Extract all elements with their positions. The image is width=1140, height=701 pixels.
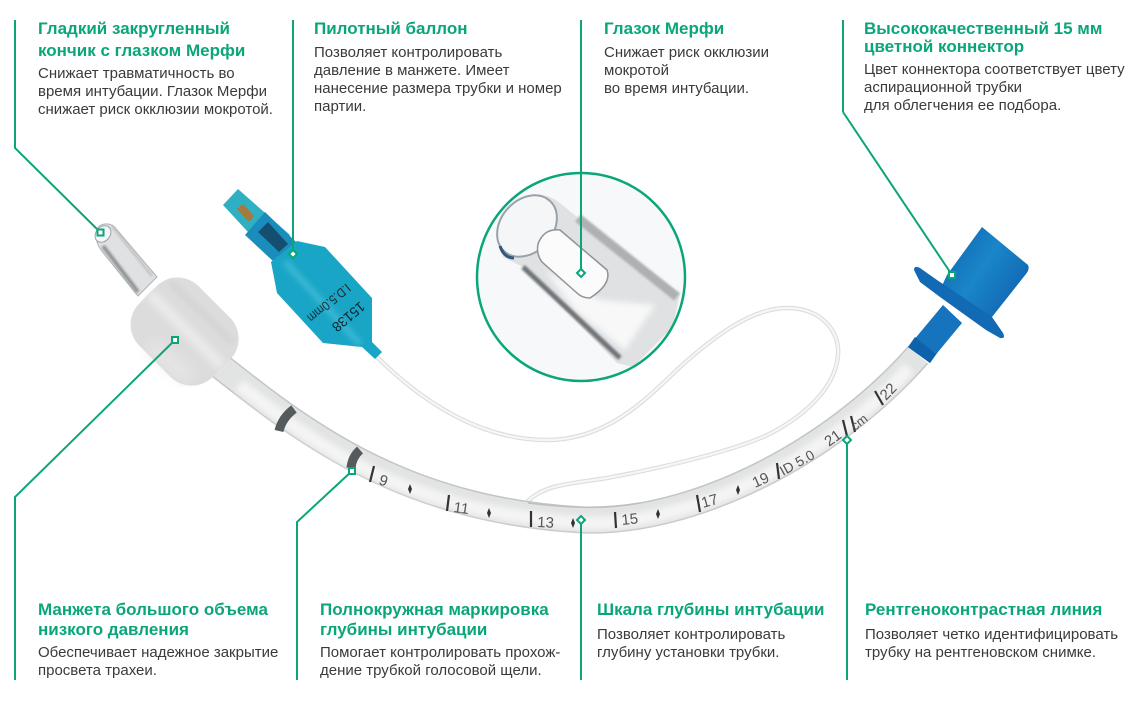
text: 15 mm connector: [864, 19, 1125, 114]
text: depth scale: глубину установки трубки.: [597, 644, 779, 661]
depth scale numbers: 21: [821, 427, 845, 450]
pilot balloon: 15138: [329, 299, 368, 336]
text: smooth rounded tip: Гладкий закругленный: [38, 19, 230, 38]
depth scale numbers: 17: [699, 491, 720, 512]
text: depth scale: [597, 600, 824, 661]
depth scale numbers: ID 5.0: [777, 446, 817, 479]
pilot balloon: I.D.5.0mm: [304, 281, 354, 326]
depth scale numbers: 9: [377, 472, 390, 490]
text: depth marking: Помогает контролировать прохож-: [320, 644, 560, 661]
text: smooth rounded tip: кончик с глазком Мерфи: [38, 41, 245, 60]
15 mm blue connector: [908, 227, 1029, 363]
leader line markers: [98, 230, 955, 524]
depth scale numbers: 19: [750, 469, 772, 492]
text: pilot balloon: [314, 19, 562, 115]
text: 15 mm connector: Высококачественный 15 мм: [864, 19, 1102, 38]
text: depth marking: глубины интубации: [320, 620, 487, 639]
text: Murphy eye: Снижает риск окклюзии: [604, 44, 769, 61]
text: cuff: Обеспечивает надежное закрытие: [38, 644, 278, 661]
text: smooth rounded tip: [38, 19, 273, 118]
text: radiopaque line: трубку на рентгеновском снимке.: [865, 644, 1096, 661]
distal tip with Murphy eye: [92, 223, 157, 296]
pilot balloon: [271, 241, 382, 359]
text: 15 mm connector: аспирационной трубки: [864, 79, 1022, 96]
text: cuff: низкого давления: [38, 620, 189, 639]
text: pilot balloon: партии.: [314, 98, 366, 115]
depth scale numbers: 11: [452, 499, 470, 518]
depth scale numbers: 15: [621, 510, 639, 529]
text: pilot balloon: нанесение размера трубки и номер: [314, 80, 562, 97]
depth scale numbers: cm: [848, 411, 871, 433]
text: 15 mm connector: Цвет коннектора соответствует цвету: [864, 61, 1125, 78]
text: 15 mm connector: для облегчения ее подбора.: [864, 97, 1061, 114]
text: depth marking: [320, 600, 560, 679]
text: depth marking: дение трубкой голосовой щели.: [320, 662, 542, 679]
pilot balloon connector: [223, 189, 296, 262]
text: cuff: просвета трахеи.: [38, 662, 157, 679]
text: pilot balloon: Позволяет контролировать: [314, 44, 502, 61]
text: Murphy eye: мокротой: [604, 62, 669, 79]
full-circle depth marks: [279, 409, 360, 468]
text: radiopaque line: Позволяет четко идентифицировать: [865, 626, 1118, 643]
depth scale numbers: 22: [877, 380, 900, 404]
depth scale numbers: 13: [537, 514, 554, 532]
depth scale numbers: [370, 380, 900, 532]
text: smooth rounded tip: Снижает травматичность во: [38, 65, 235, 82]
text: Murphy eye: во время интубации.: [604, 80, 749, 97]
text: depth marking: Полнокружная маркировка: [320, 600, 549, 619]
leader lines: [15, 20, 952, 680]
text: pilot balloon: Пилотный баллон: [314, 19, 467, 38]
text: smooth rounded tip: время интубации. Глазок Мерфи: [38, 83, 267, 100]
text: depth scale: Позволяет контролировать: [597, 626, 785, 643]
text: Murphy eye: [604, 19, 769, 97]
low-pressure cuff: [118, 265, 251, 398]
text: cuff: [38, 600, 278, 679]
magnified Murphy eye circle: [477, 173, 685, 381]
text: depth scale: Шкала глубины интубации: [597, 600, 824, 619]
text: 15 mm connector: цветной коннектор: [864, 37, 1024, 56]
tube body: [205, 354, 918, 523]
text: cuff: Манжета большого объема: [38, 600, 268, 619]
text: Murphy eye: Глазок Мерфи: [604, 19, 724, 38]
pilot inflation line: [375, 308, 838, 502]
text: radiopaque line: Рентгеноконтрастная линия: [865, 600, 1102, 619]
text: pilot balloon: давление в манжете. Имеет: [314, 62, 509, 79]
text: radiopaque line: [865, 600, 1118, 661]
text: smooth rounded tip: снижает риск окклюзии мокротой.: [38, 101, 273, 118]
